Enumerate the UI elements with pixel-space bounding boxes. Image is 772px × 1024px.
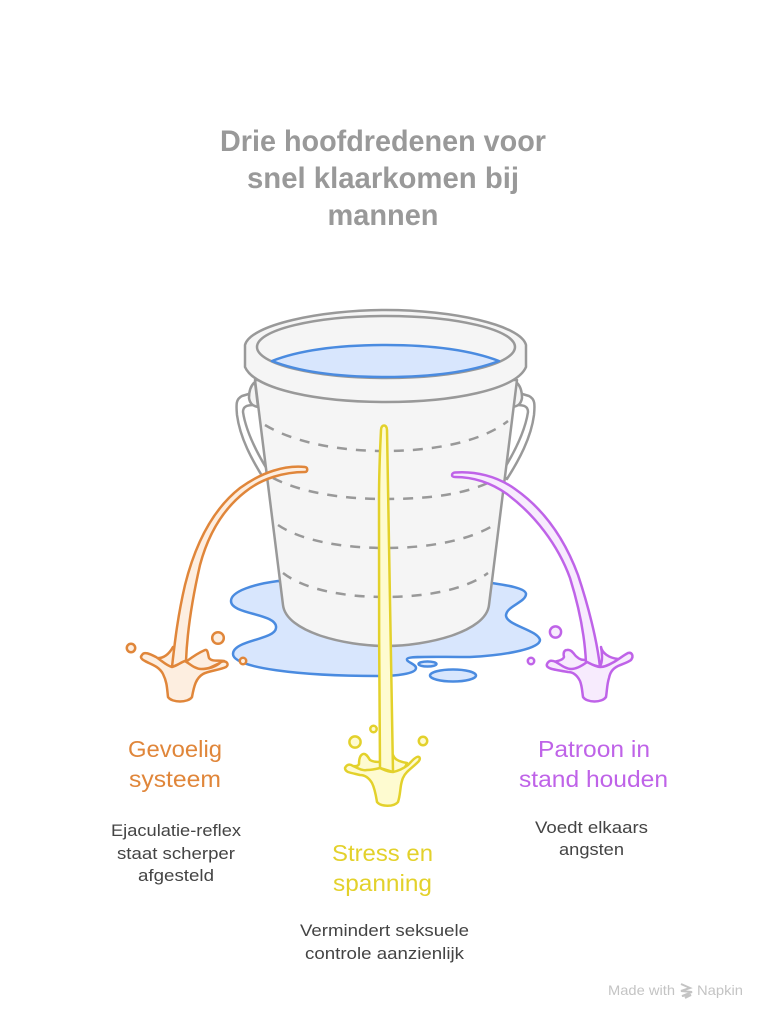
label: stress en spanning: spanning bbox=[333, 870, 432, 896]
label: gevoelig systeem bbox=[111, 736, 242, 885]
water surface bbox=[272, 345, 499, 377]
footer: made with napkin: Made with bbox=[608, 982, 675, 998]
label: gevoelig systeem: staat scherper bbox=[117, 844, 235, 863]
label: stress en spanning: controle aanzienlijk bbox=[305, 944, 465, 963]
label: stress en spanning bbox=[300, 840, 469, 963]
footer: made with napkin: Napkin bbox=[697, 982, 743, 998]
bucket bbox=[237, 310, 534, 646]
purple stream bbox=[452, 472, 600, 667]
orange leak bbox=[127, 467, 307, 702]
orange stream bbox=[172, 467, 307, 667]
bucket rim bbox=[245, 310, 526, 402]
label: patroon in stand houden: Voedt elkaars bbox=[535, 818, 648, 837]
yellow splash base bbox=[345, 757, 420, 806]
label: gevoelig systeem: Gevoelig bbox=[128, 736, 222, 762]
label: patroon in stand houden: stand houden bbox=[519, 766, 668, 792]
purple droplets bbox=[550, 626, 561, 638]
label: gevoelig systeem: Ejaculatie-reflex bbox=[111, 821, 242, 840]
label: patroon in stand houden bbox=[519, 736, 668, 859]
icon: right handle knob bbox=[513, 382, 522, 407]
title bbox=[220, 125, 546, 232]
bucket body bbox=[255, 380, 517, 646]
label: gevoelig systeem: afgesteld bbox=[138, 866, 214, 885]
label: patroon in stand houden: angsten bbox=[559, 840, 624, 859]
icon: left handle knob bbox=[249, 382, 258, 407]
title: Drie hoofdredenen voor bbox=[220, 125, 546, 158]
puddle bbox=[231, 581, 540, 682]
yellow stream bbox=[379, 426, 393, 772]
purple leak bbox=[452, 472, 632, 702]
title: snel klaarkomen bij bbox=[247, 162, 519, 195]
icon: right handle bbox=[501, 393, 534, 479]
purple splash back wings bbox=[553, 647, 618, 672]
yellow leak bbox=[345, 426, 427, 806]
bucket inner opening bbox=[257, 316, 515, 378]
title: mannen bbox=[328, 199, 438, 232]
icon: left handle bbox=[237, 393, 270, 479]
label: gevoelig systeem: systeem bbox=[129, 766, 221, 792]
label: stress en spanning: Stress en bbox=[332, 840, 433, 866]
dashed bands bbox=[265, 421, 508, 597]
orange droplets bbox=[127, 644, 135, 652]
icon: napkin logo bbox=[681, 984, 692, 998]
yellow droplets bbox=[349, 736, 361, 748]
orange splash base bbox=[141, 653, 228, 702]
purple splash base bbox=[547, 653, 632, 702]
label: patroon in stand houden: Patroon in bbox=[538, 736, 650, 762]
orange splash back wings bbox=[155, 647, 224, 670]
label: stress en spanning: Vermindert seksuele bbox=[300, 921, 469, 940]
footer: made with napkin bbox=[608, 982, 743, 998]
yellow splash back wings bbox=[350, 754, 407, 778]
